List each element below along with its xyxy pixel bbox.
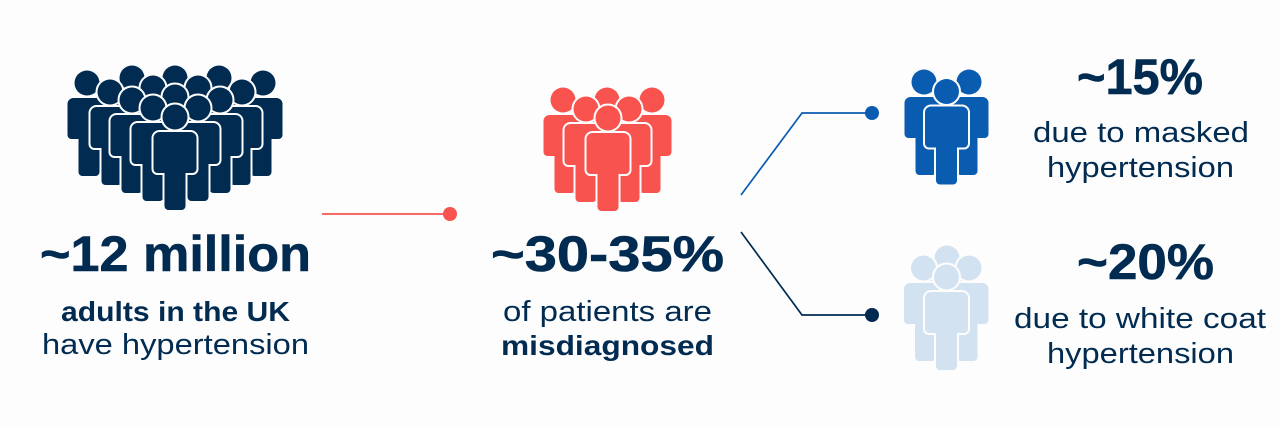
heading: 30-35 percent: ~30-35% [491, 226, 724, 282]
heading: 12 million: ~12 million [40, 226, 311, 282]
arrow: navy branch connector [741, 232, 879, 322]
panel: masked hypertension [904, 49, 1249, 184]
text: due to masked: due to masked [1033, 117, 1249, 149]
text: adults in the UK: adults in the UK [61, 296, 290, 327]
text: of patients are: of patients are [503, 296, 712, 328]
text: due to white coat: due to white coat [1014, 303, 1266, 335]
panel: misdiagnosed patients [491, 88, 724, 361]
text: have hypertension: have hypertension [42, 329, 309, 361]
arrow: red connector [322, 207, 457, 221]
text: misdiagnosed: misdiagnosed [501, 330, 714, 361]
icon: blue group [904, 70, 988, 184]
panel: total adults with hypertension [40, 66, 311, 361]
heading: 20 percent: ~20% [1077, 234, 1214, 290]
icon: pale blue group [904, 246, 988, 370]
icon: red crowd [544, 88, 672, 211]
arrow: blue branch connector [741, 106, 879, 195]
text: hypertension: hypertension [1047, 152, 1234, 184]
panel: white coat hypertension [904, 234, 1266, 370]
icon: large dark crowd [68, 66, 282, 210]
text: hypertension: hypertension [1047, 338, 1234, 370]
heading: 15 percent: ~15% [1077, 49, 1203, 105]
